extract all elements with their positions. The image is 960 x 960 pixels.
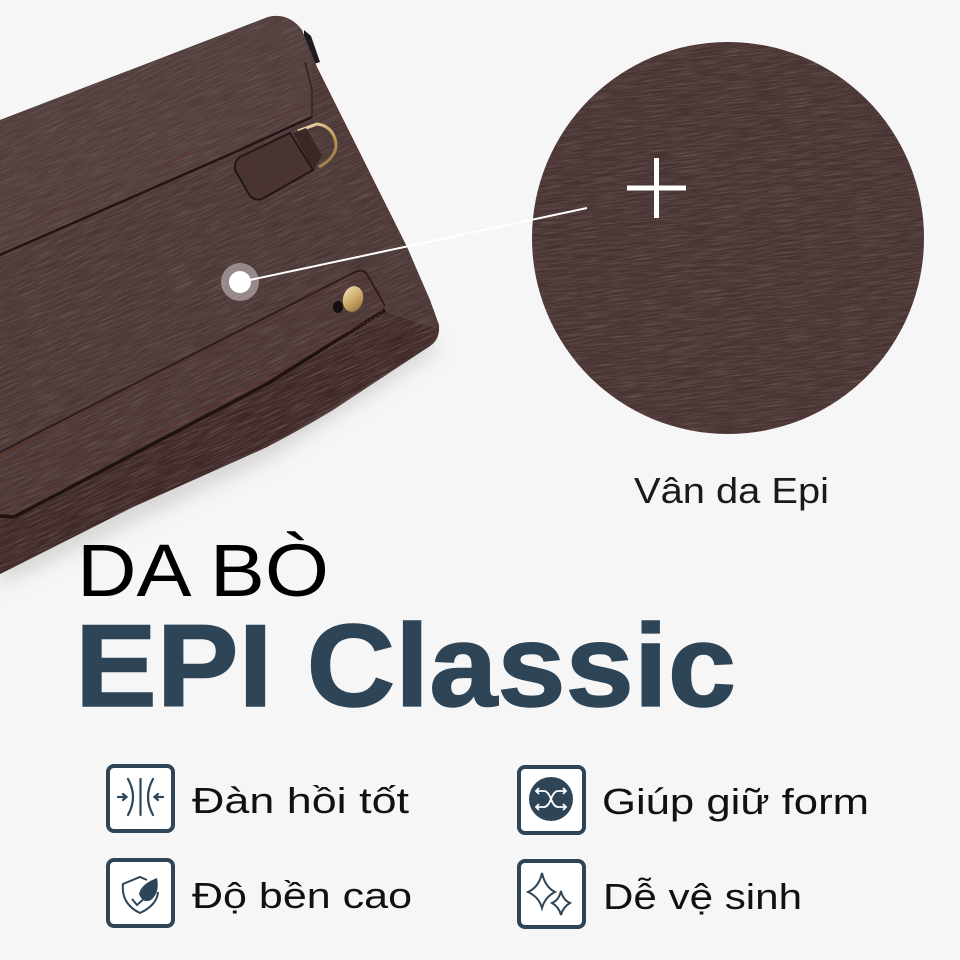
heading: DA BÒ: DA BÒ: [77, 529, 329, 612]
heading: EPI Classic: EPI Classic: [75, 600, 736, 731]
texture caption: Vân da Epi: [634, 470, 829, 511]
feature: Dễ vệ sinh: [519, 861, 802, 927]
rivet post: [333, 301, 343, 313]
bag lower band: [0, 312, 440, 574]
leather texture circle: [532, 42, 924, 434]
label: Đàn hồi tốt: [192, 780, 409, 821]
photo: leather bag: [0, 16, 440, 574]
icon: elastic: [108, 766, 173, 831]
bag tab: [235, 133, 313, 200]
label: Giúp giữ form: [602, 781, 869, 822]
icon: shield with leaf: [108, 860, 173, 926]
callout line: [250, 208, 587, 280]
label: Dễ vệ sinh: [603, 876, 802, 917]
bag strap hardware at back: [304, 30, 320, 64]
hotspot dot: [221, 263, 259, 301]
strap edges: [0, 271, 385, 452]
bag shadow: [0, 335, 436, 585]
D-ring loop: [293, 128, 322, 170]
D-ring: [298, 124, 336, 167]
feature: Đàn hồi tốt: [108, 766, 409, 831]
feature: Độ bền cao: [108, 860, 412, 926]
plus icon: [627, 158, 686, 218]
label: Độ bền cao: [192, 875, 412, 916]
icon: sparkles: [519, 861, 584, 927]
bag strap: [360, 313, 384, 330]
icon: crossing arrows: [519, 767, 584, 833]
stitching: [0, 65, 437, 509]
flap shading: [0, 117, 312, 255]
bag flap: [0, 16, 303, 120]
rivet: [340, 284, 366, 314]
feature: Giúp giữ form: [519, 767, 869, 833]
